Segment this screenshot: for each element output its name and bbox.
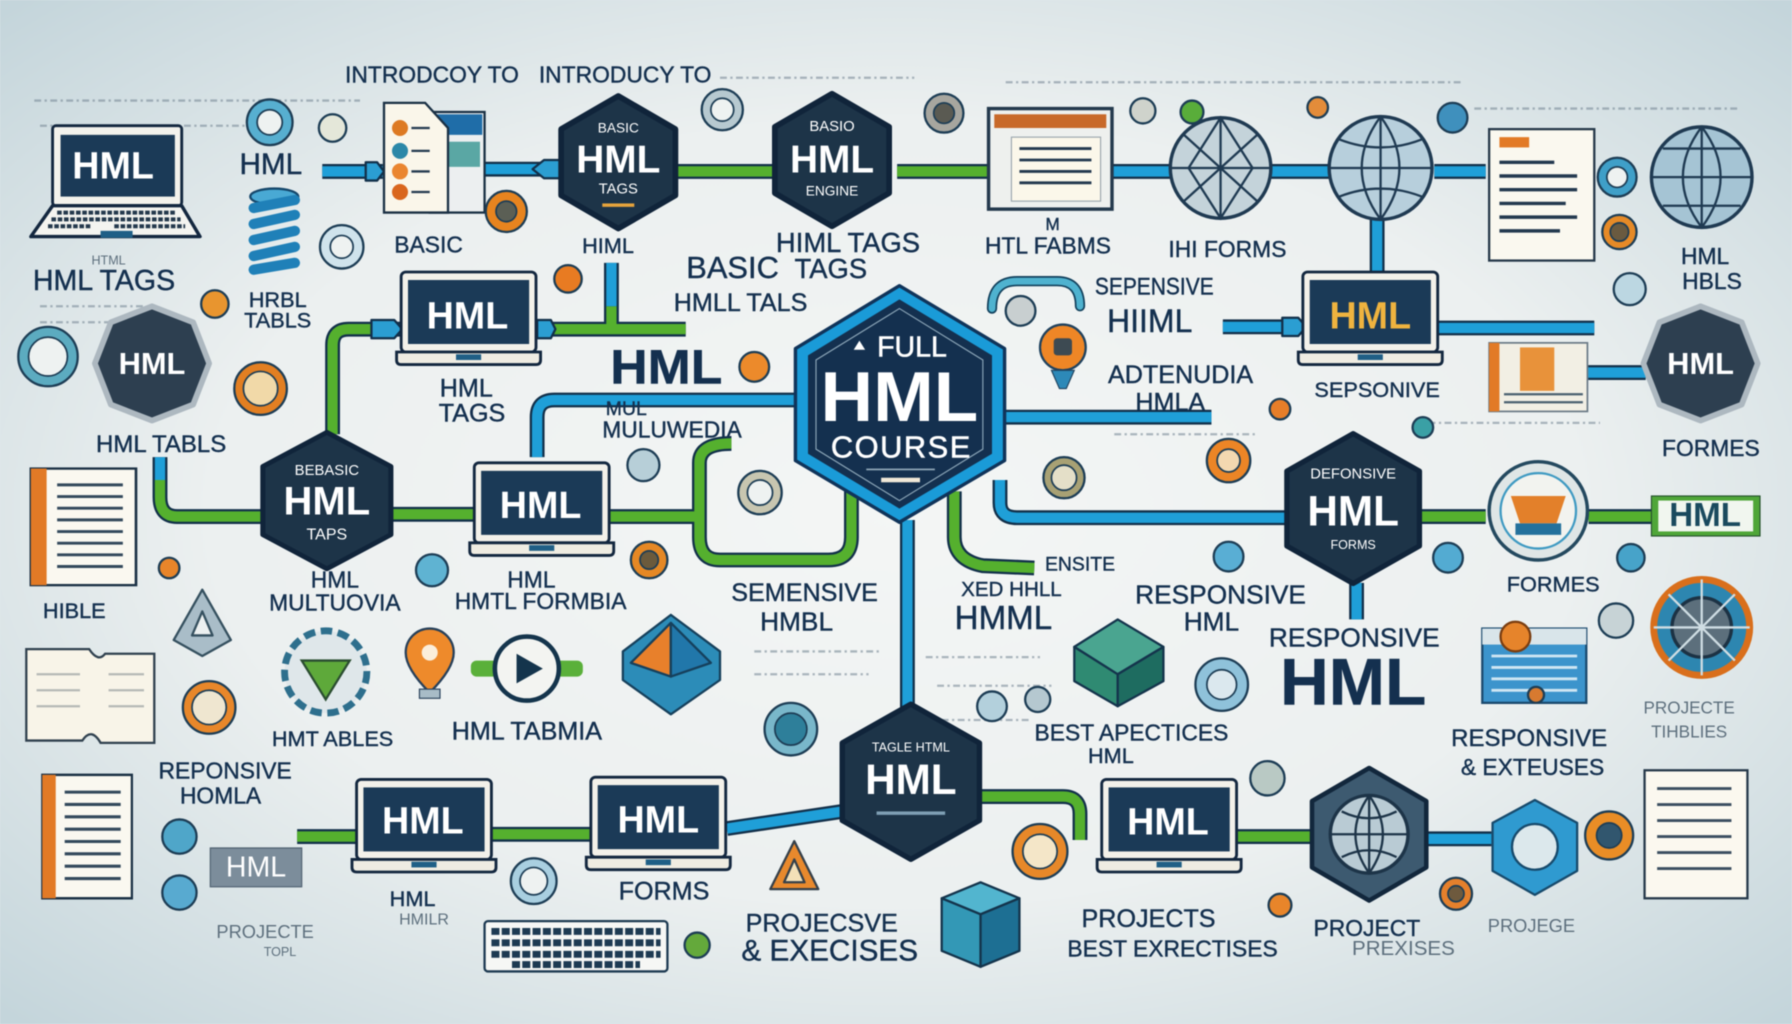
text labels: PROJECSVE: [746, 909, 898, 937]
icon: orange box ring: [1489, 462, 1587, 560]
badge: basic html: ENGINE: [806, 183, 858, 198]
heading labels: top row: [345, 61, 711, 87]
badge: basic html: HML: [790, 139, 874, 181]
text labels: HMLL TALS: [674, 289, 807, 317]
heading labels: top row: INTRODUCY TO: [539, 61, 711, 87]
central hexagon: a full html course: FULL: [877, 331, 947, 363]
badge: basic tags: HML: [576, 138, 660, 181]
icon: orange triangle: [770, 841, 818, 889]
badge: responsive right: [1287, 434, 1419, 583]
text labels: HIML TAGS: [776, 227, 920, 258]
text labels: HML: [610, 342, 722, 394]
text labels: HML: [239, 148, 302, 181]
laptop: bottom two: HML: [617, 798, 699, 840]
keyboard: [485, 921, 667, 971]
connector network: [160, 169, 1651, 840]
laptop: top left: [31, 126, 200, 238]
text labels: BASIC: [686, 250, 779, 285]
text labels: HML: [311, 566, 359, 592]
text labels: HML: [1681, 243, 1729, 269]
text labels: HML TABLS: [96, 431, 226, 458]
text labels: HMML: [955, 600, 1052, 637]
text labels: HML: [1184, 607, 1239, 637]
laptop: centre: HML: [500, 484, 581, 526]
central hexagon: a full html course: COURSE: [831, 429, 970, 464]
badge: globe hexagon: [1312, 768, 1426, 901]
text labels: HIIML: [1107, 303, 1192, 339]
badge: far right: [1643, 306, 1758, 421]
browser window: [989, 109, 1112, 209]
badge: responsive right: HML: [1307, 487, 1399, 534]
text labels: BEST APECTICES: [1035, 720, 1228, 746]
text labels: HRBL: [249, 287, 307, 312]
text labels: [33, 148, 1760, 967]
text labels: TABLS: [244, 307, 311, 332]
laptop: bottom one: [352, 779, 496, 872]
document: orange binder: [31, 469, 136, 585]
icon: teal cube: [942, 882, 1019, 967]
laptop: upper centre left: HML: [427, 294, 508, 336]
text labels: HMTL FORMBIA: [455, 588, 627, 614]
text labels: HMLA: [1135, 388, 1205, 416]
text labels: SEPENSIVE: [1095, 273, 1214, 300]
icon: triangle cone: [174, 590, 231, 656]
text labels: PROJECTS: [1082, 905, 1216, 933]
icon: blue hexagon ring: [1493, 800, 1577, 895]
text labels: ADTENUDIA: [1108, 361, 1253, 389]
browser card: [1482, 622, 1586, 703]
badge: far right: HML: [1667, 346, 1734, 381]
icon: globe one: [1170, 118, 1271, 218]
text labels: PROJECTE: [1643, 697, 1735, 717]
badge: basic tags: TAGS: [599, 182, 638, 198]
text labels: HMT ABLES: [272, 726, 393, 751]
badge: basic tags: [561, 96, 675, 229]
text labels: MUL: [606, 398, 647, 420]
text labels: TOPL: [264, 945, 296, 959]
box label: hml green: [1651, 496, 1760, 536]
icon: gem: [623, 615, 720, 714]
text labels: SEMENSIVE: [731, 579, 878, 607]
badge: bottom centre: [842, 704, 979, 859]
laptop: bottom two: [586, 777, 730, 870]
text labels: HML: [1088, 743, 1134, 768]
document: bottom left: [42, 775, 132, 898]
text labels: SEPSONIVE: [1314, 377, 1440, 402]
badge: responsive right: FORMS: [1330, 538, 1376, 552]
text labels: HMBL: [760, 607, 833, 637]
badge: basic html: BASIO: [809, 119, 855, 135]
text labels: HML: [507, 566, 556, 592]
text labels: IHI FORMS: [1168, 236, 1286, 262]
box label: hml grey: [210, 848, 302, 887]
text labels: MULTUOVIA: [269, 589, 401, 615]
text labels: REPONSIVE: [158, 757, 292, 783]
central hexagon: a full html course: [795, 286, 1005, 522]
laptop: bottom three: [1097, 779, 1241, 872]
text labels: M: [1045, 214, 1060, 234]
document: orange striped panel: [1489, 343, 1587, 411]
text labels: TAGS: [439, 400, 505, 428]
text labels: PROJECTE: [216, 921, 314, 942]
connector joints: [366, 160, 1306, 338]
badge: basic tags lower left: HML: [284, 480, 370, 524]
text labels: MULUWEDIA: [602, 417, 743, 443]
badge: bottom centre: HML: [865, 756, 957, 803]
laptop: top left: HML: [72, 145, 154, 187]
badge: bottom centre: TAGLE HTML: [872, 740, 950, 754]
text labels: TIHBLIES: [1651, 721, 1727, 741]
icon: circle inner marks: [29, 98, 1629, 902]
text labels: & EXECISES: [741, 934, 918, 967]
text labels: FORMES: [1662, 435, 1760, 461]
document: outline card: [384, 103, 485, 213]
text labels: ENSITE: [1045, 554, 1115, 576]
icon: globe three: [1651, 127, 1752, 227]
badge: responsive right: DEFONSIVE: [1310, 466, 1396, 482]
text labels: HML: [440, 375, 493, 403]
text labels: HIBLE: [43, 598, 106, 623]
open paper: [26, 649, 154, 743]
text labels: FORMS: [619, 877, 709, 905]
text labels: HOMLA: [180, 782, 262, 808]
icon: orange gear wheel: [1654, 579, 1750, 675]
text labels: FORMES: [1507, 571, 1600, 596]
heading labels: top row: INTRODCOY TO: [345, 61, 519, 87]
text labels: RESPONSIVE: [1135, 579, 1306, 609]
icon: spring: [250, 189, 298, 270]
text labels: HML TAGS: [33, 265, 175, 297]
text labels: RESPONSIVE: [1451, 725, 1607, 752]
badge: basic html: [775, 94, 889, 226]
text labels: HTML: [91, 254, 126, 268]
icon: green cube: [1074, 619, 1163, 706]
laptop: upper centre left: [397, 272, 541, 365]
text labels: BASIC: [394, 232, 463, 258]
icon: small circles: [18, 89, 1646, 958]
laptop: centre: [470, 463, 614, 555]
laptop: upper right: [1298, 272, 1442, 365]
icon: gear with green leaf: [285, 631, 367, 713]
badge: basic tags lower left: BEBASIC: [295, 463, 359, 479]
text labels: & EXTEUSES: [1461, 754, 1604, 780]
icon: curved hook: [992, 281, 1080, 309]
fine text lines: [34, 78, 1737, 720]
text labels: HMILR: [399, 912, 449, 928]
box label: hml grey: HML: [226, 851, 286, 883]
document: right list: [1489, 129, 1594, 261]
central hexagon: a full html course: HML: [821, 358, 978, 437]
text labels: PROJEGE: [1488, 915, 1575, 936]
text labels: HML: [390, 886, 435, 911]
badge: left: [95, 306, 209, 421]
icon: bulb: [1040, 325, 1086, 389]
text labels: RESPONSIVE: [1269, 623, 1440, 653]
text labels: TAGS: [795, 253, 867, 284]
text labels: HML: [1280, 645, 1426, 719]
text labels: HML TABMIA: [452, 717, 602, 745]
badge: left: HML: [119, 346, 185, 381]
text labels: HIML: [582, 233, 634, 258]
laptop: bottom three: HML: [1127, 801, 1209, 843]
badge: basic tags lower left: [263, 432, 391, 569]
icon: globe two: [1329, 117, 1432, 219]
text labels: BEST EXRECTISES: [1067, 936, 1278, 962]
text labels: HBLS: [1682, 268, 1742, 294]
text labels: PREXISES: [1352, 937, 1455, 960]
laptop: upper right: HML: [1329, 294, 1411, 336]
icon: play button: [471, 637, 583, 701]
icon: location pin: [406, 629, 454, 698]
document: bottom right: [1645, 770, 1747, 898]
text labels: PROJECT: [1314, 915, 1420, 941]
text labels: XED HHLL: [961, 578, 1062, 601]
box label: hml green: HML: [1669, 497, 1741, 534]
laptop: bottom one: HML: [382, 800, 464, 842]
badge: basic tags: BASIC: [598, 120, 639, 135]
text labels: HTL FABMS: [985, 233, 1111, 259]
badge: basic tags lower left: TAPS: [307, 526, 347, 543]
